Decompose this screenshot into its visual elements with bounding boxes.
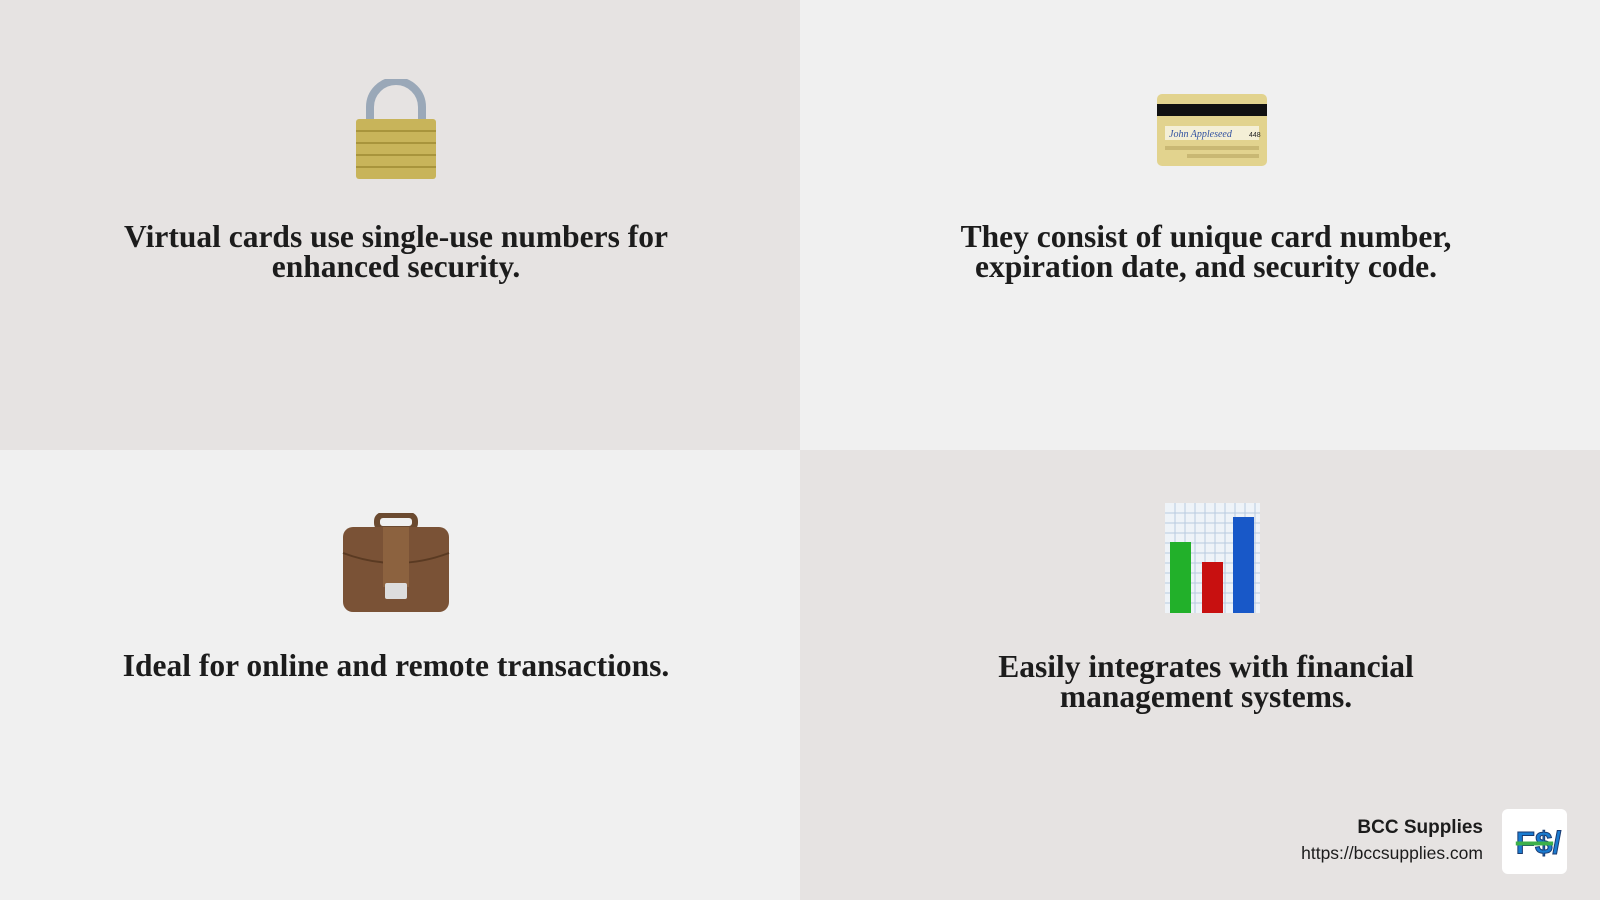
text: integrations: Easily integrates with financial: [998, 649, 1414, 684]
logo: [1502, 809, 1567, 874]
text: card details: expiration date, and security code.: [975, 249, 1437, 284]
icon: credit card: 448: [1249, 132, 1261, 139]
brand url: https://bccsupplies.com: [1301, 843, 1483, 863]
text: online transactions: Ideal for online and remote transactions.: [123, 648, 669, 683]
text: card details: [961, 219, 1451, 284]
icon: credit card: John Appleseed: [1169, 129, 1233, 140]
brand name: BCC Supplies: [1357, 817, 1483, 838]
logo: F$/: [1516, 824, 1562, 860]
text: integrations: [998, 649, 1414, 714]
icon: credit card: [1157, 94, 1267, 166]
icon: briefcase: [342, 513, 450, 612]
panel: online transactions: [0, 450, 800, 900]
panel: integrations: [800, 450, 1600, 900]
panel: single-use numbers: [0, 0, 800, 450]
text: single-use numbers: Virtual cards use single-use numbers for: [124, 219, 668, 254]
icon: padlock: [356, 79, 436, 179]
text: integrations: management systems.: [1060, 679, 1352, 714]
text: single-use numbers: enhanced security.: [272, 249, 520, 284]
text: single-use numbers: [124, 219, 668, 284]
brand block: [1301, 809, 1567, 874]
panel: card details: [800, 0, 1600, 450]
text: card details: They consist of unique card number,: [961, 219, 1451, 254]
icon: bar chart: [1165, 503, 1260, 613]
